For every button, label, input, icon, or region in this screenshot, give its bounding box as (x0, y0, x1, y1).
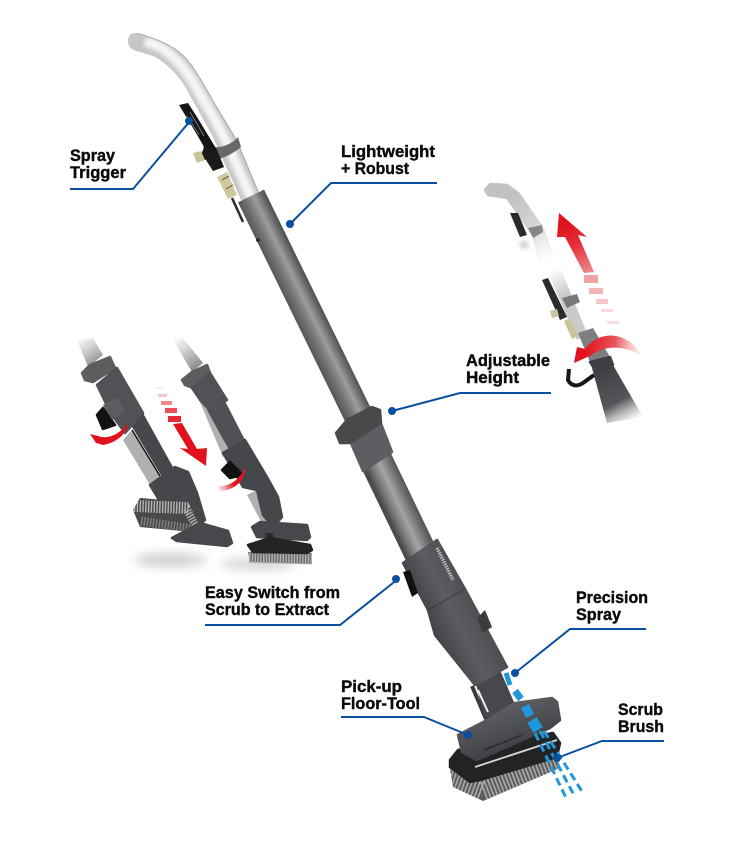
silver strip (475, 740, 557, 767)
callout: lightweight robust (286, 143, 437, 228)
collar band (590, 357, 613, 373)
handle band (214, 137, 241, 159)
callout: pick-up floor-tool: Pick-up (341, 678, 402, 696)
callout: scrub brush: Brush (618, 718, 664, 736)
adapter housing (403, 540, 507, 685)
head vent (484, 735, 522, 750)
main wand (128, 33, 562, 801)
floor shadows (134, 553, 296, 570)
red rotate arrow (216, 467, 245, 491)
callout: precision spray: Spray (576, 606, 622, 624)
silver handle (128, 33, 260, 202)
callout: spray trigger: Spray (70, 147, 116, 165)
callout: spray trigger (70, 117, 193, 189)
callout: adjustable height: Adjustable (466, 352, 550, 370)
callout: precision spray: Precision (576, 589, 648, 607)
callout: scrub brush (553, 701, 664, 762)
callout: adjustable height: Height (466, 369, 520, 387)
callout: spray trigger: Trigger (70, 164, 127, 182)
brass connectors (193, 151, 205, 163)
side button (477, 610, 492, 633)
red rotate arrow (90, 423, 128, 445)
callout: adjustable height (388, 352, 551, 415)
upper grey tube (251, 196, 359, 417)
nozzle (172, 523, 232, 546)
floor tool head (458, 698, 560, 760)
spray trigger mechanism (179, 103, 243, 222)
inset: switch scrub to extract (77, 338, 312, 570)
dial (97, 408, 115, 429)
scrub bristles (450, 760, 560, 801)
callout: scrub brush: Scrub (618, 701, 663, 719)
scrub-position tool (173, 338, 312, 564)
raised handle ghost (485, 184, 558, 263)
inset: adjustable height (485, 184, 643, 423)
callout: lightweight robust: + Robust (341, 160, 409, 178)
callout: easy switch: Scrub to Extract (205, 601, 329, 619)
blue precision spray (506, 673, 583, 800)
callout: precision spray (511, 589, 648, 677)
grey tube (578, 328, 610, 367)
lower handle section (547, 267, 587, 340)
red curved arrow (574, 335, 642, 363)
height collar (336, 407, 381, 443)
brand mark (437, 548, 453, 580)
neck (472, 673, 513, 722)
extract-position tool (77, 338, 232, 546)
black brush plate (450, 733, 560, 782)
lower trigger (542, 278, 567, 320)
callout: pick-up floor-tool (341, 678, 472, 739)
lower grey tube (372, 452, 422, 556)
collar hook (568, 369, 594, 385)
callout: easy switch (205, 575, 400, 625)
red down arrow (155, 387, 207, 466)
dark body (592, 365, 643, 423)
brass connectors (550, 309, 578, 339)
tube side detail (256, 238, 260, 242)
callout: easy switch: Easy Switch from (205, 584, 340, 602)
lower sleeve (350, 421, 392, 471)
side clip (403, 570, 418, 597)
brush (133, 498, 200, 532)
band (562, 294, 580, 308)
hose (232, 198, 243, 222)
dial mount (103, 397, 125, 420)
callout: lightweight robust: Lightweight (341, 143, 435, 161)
red up arrow (557, 213, 619, 324)
callout: pick-up floor-tool: Floor-Tool (341, 695, 420, 713)
